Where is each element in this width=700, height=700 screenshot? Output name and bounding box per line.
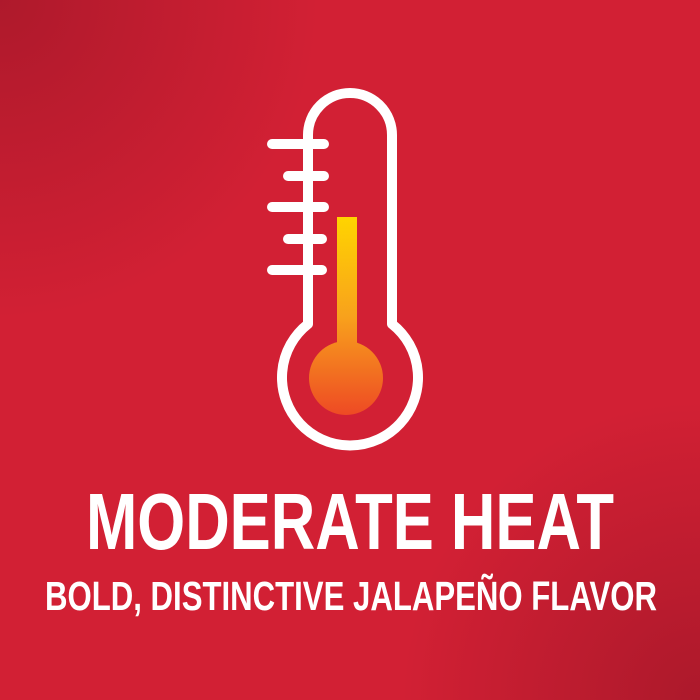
icon: thermometer bbox=[272, 93, 418, 445]
